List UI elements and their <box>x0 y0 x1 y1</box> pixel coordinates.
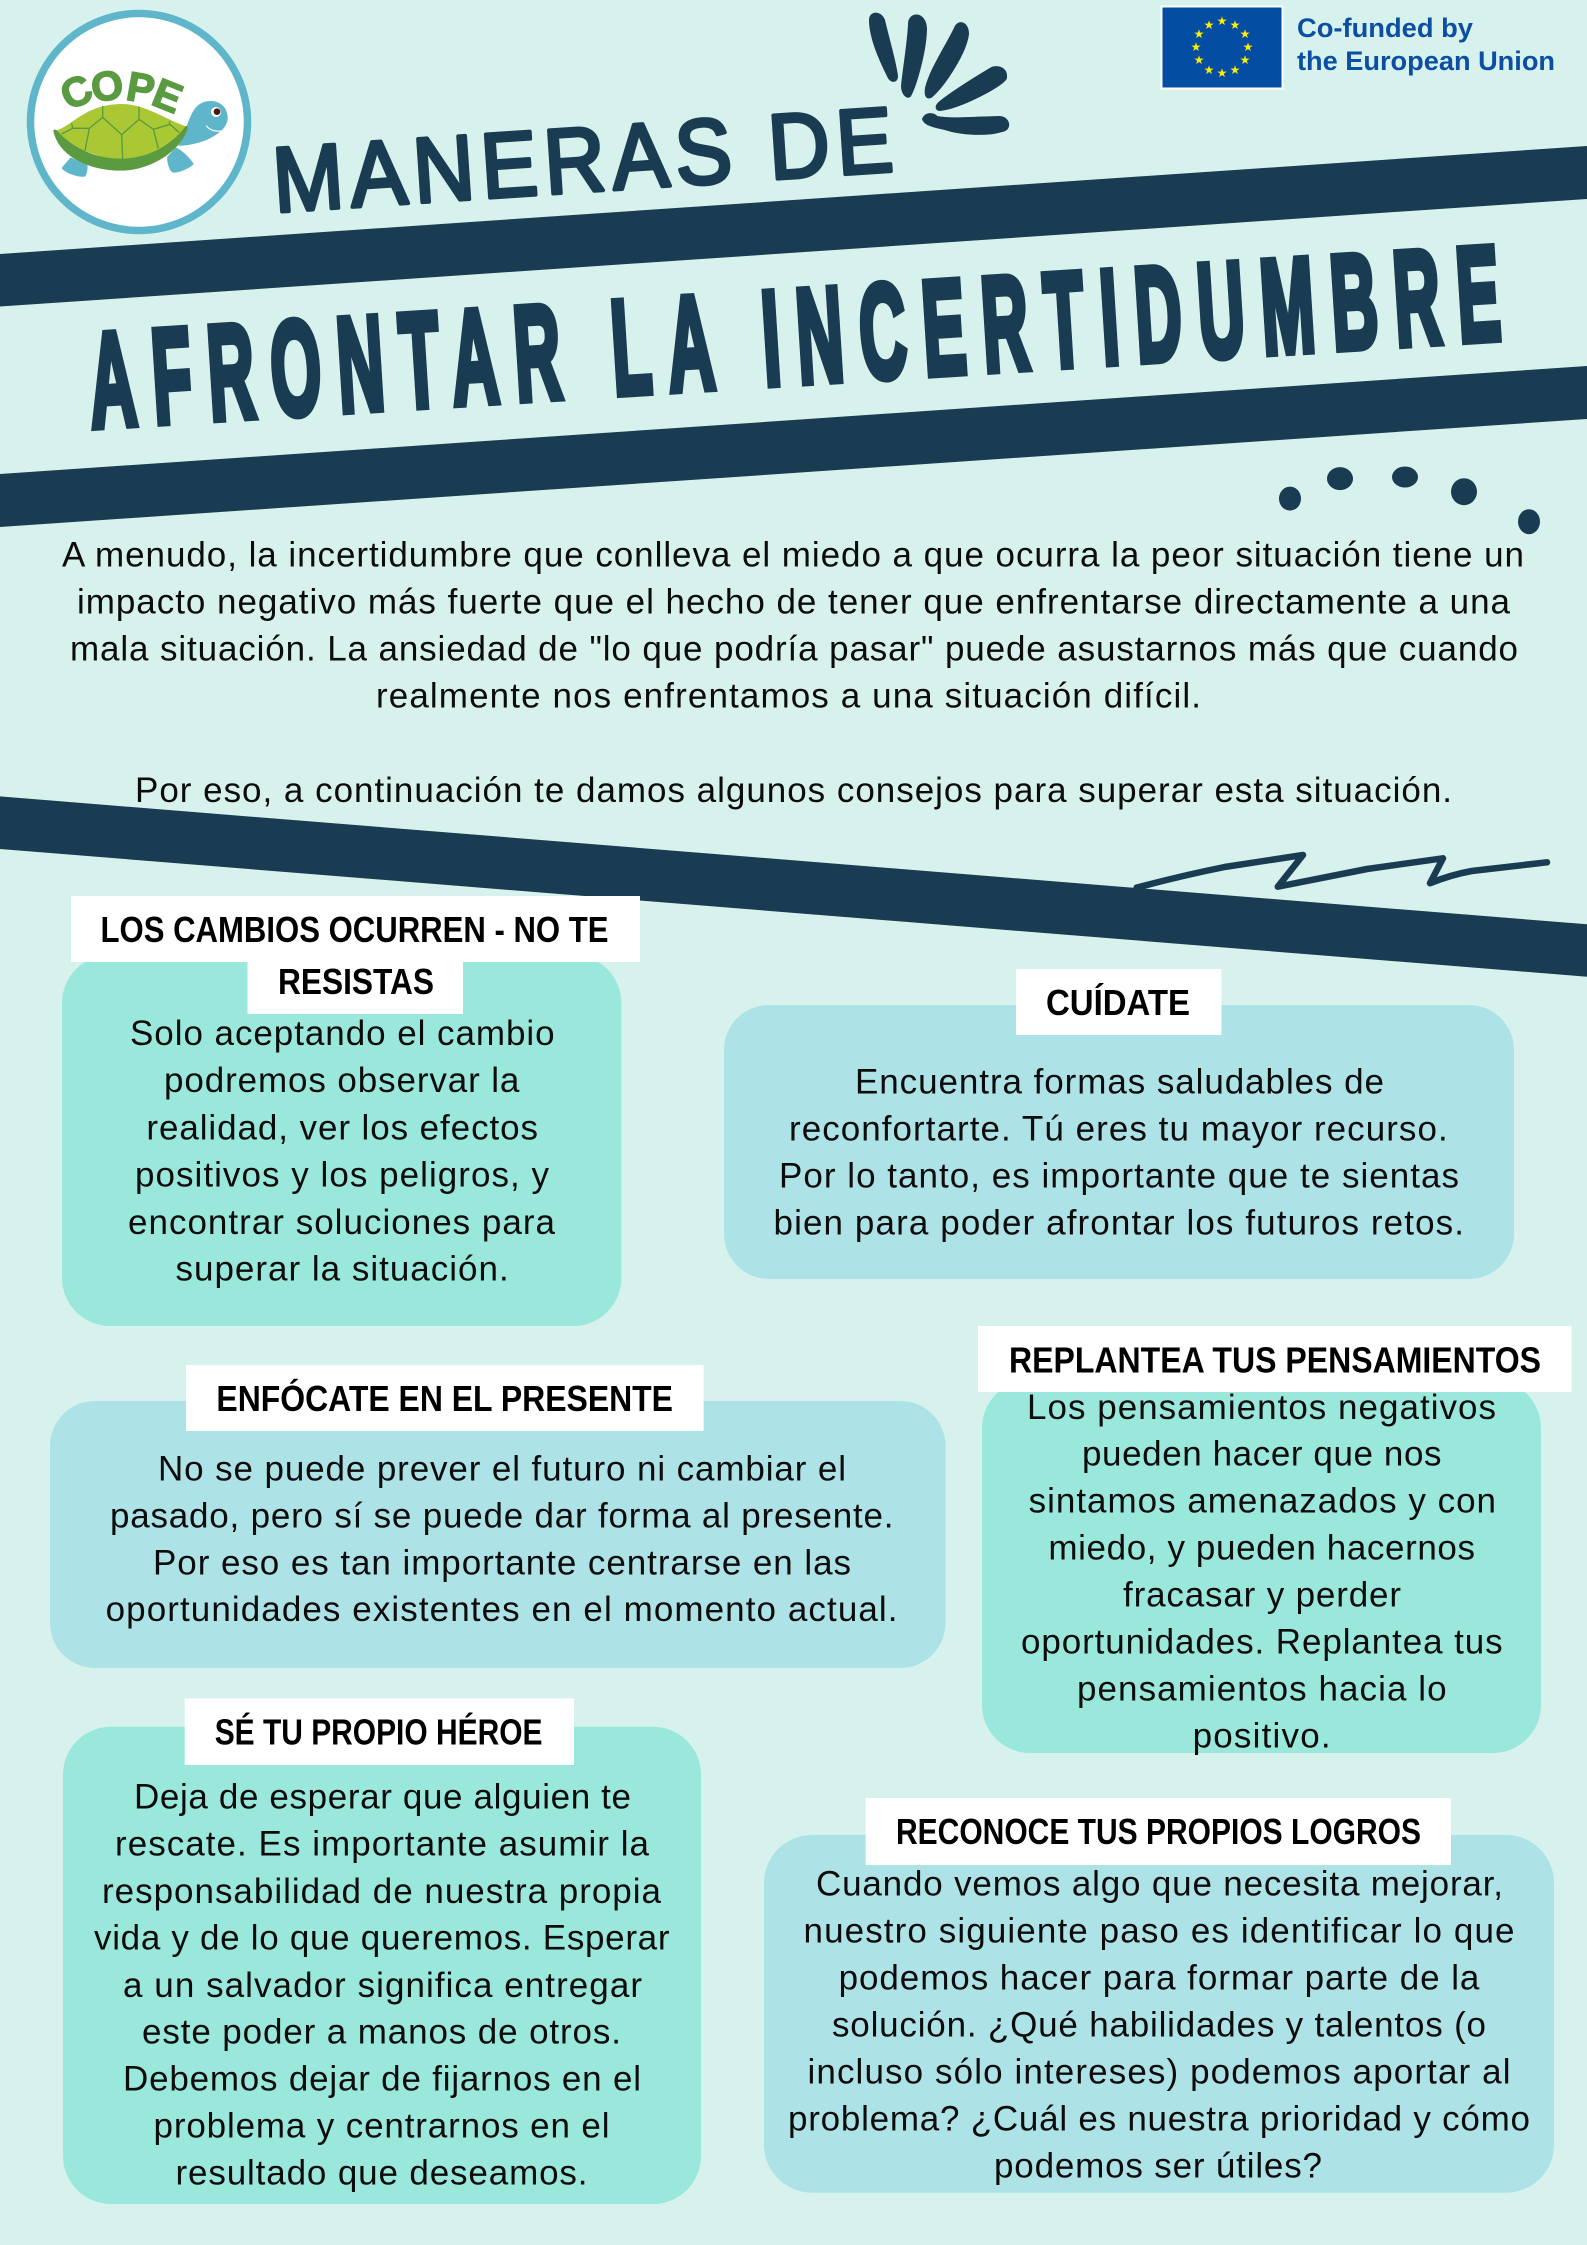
panel: replantea tus pensamientos: Los pensamientos negativos <box>1027 1388 1496 1427</box>
panel: reconoce tus propios logros: RECONOCE TUS PROPIOS LOGROS <box>896 1811 1421 1852</box>
intro paragraph: Por eso, a continuación te damos algunos consejos para superar esta situación. <box>135 771 1452 810</box>
panel: reconoce tus propios logros: incluso sólo intereses) podemos aportar al <box>808 2052 1510 2092</box>
panel: los cambios ocurren: podremos observar la <box>164 1061 520 1100</box>
panel: cuídate: bien para poder afrontar los futuros retos. <box>774 1204 1464 1242</box>
panel: sé tu propio héroe: vida y de lo que queremos. Esperar <box>94 1918 670 1958</box>
lower divider bar <box>0 796 1587 977</box>
panel: enfócate en el presente: Por eso es tan importante centrarse en las <box>153 1544 851 1582</box>
logo: EU flag and co-funded text: ★ <box>1217 66 1227 80</box>
top title bar <box>0 146 1587 306</box>
logo: EU flag and co-funded text: ★ <box>1204 63 1214 77</box>
panel: sé tu propio héroe: Deja de esperar que alguien te <box>134 1778 631 1816</box>
logo: EU flag and co-funded text: Co-funded by <box>1297 13 1473 43</box>
logo: EU flag and co-funded text: ★ <box>1217 14 1227 28</box>
panel: replantea tus pensamientos: sintamos amenazados y con <box>1029 1482 1496 1521</box>
panel: sé tu propio héroe: rescate. Es importante asumir la <box>115 1824 650 1864</box>
second title bar <box>0 366 1587 527</box>
panel: sé tu propio héroe: Debemos dejar de fijarnos en el <box>123 2060 641 2098</box>
squiggle line <box>1137 855 1547 888</box>
panel: los cambios ocurren: encontrar soluciones para <box>128 1203 556 1242</box>
logo: COPE turtle badge: O <box>88 61 126 111</box>
logo: COPE turtle badge: P <box>123 63 158 113</box>
logo: COPE turtle badge: C <box>53 65 100 119</box>
panel: sé tu propio héroe <box>63 1698 701 2204</box>
panel: enfócate en el presente: oportunidades existentes en el momento actual. <box>106 1590 898 1629</box>
logo: EU flag and co-funded text: ★ <box>1194 53 1204 67</box>
decorative dots <box>1279 466 1540 534</box>
intro paragraph: realmente nos enfrentamos a una situación difícil. <box>376 677 1201 716</box>
logo: COPE turtle badge <box>30 14 248 230</box>
panel: sé tu propio héroe: resultado que deseamos. <box>176 2154 588 2192</box>
panel: replantea tus pensamientos: pueden hacer que nos <box>1082 1435 1442 1474</box>
panel: los cambios ocurren <box>62 896 640 1326</box>
intro paragraph: impacto negativo más fuerte que el hecho de tener que enfrentarse directamente a una <box>77 583 1511 622</box>
icon: burst rays <box>870 14 1008 134</box>
panel: reconoce tus propios logros: solución. ¿Qué habilidades y talentos (o <box>832 2006 1486 2044</box>
panel: los cambios ocurren: Solo aceptando el cambio <box>130 1014 555 1053</box>
logo: EU flag and co-funded text: ★ <box>1240 27 1250 41</box>
logo: EU flag and co-funded text: ★ <box>1240 53 1250 67</box>
panel: sé tu propio héroe: a un salvador significa entregar <box>123 1966 642 2005</box>
logo: EU flag and co-funded text: ★ <box>1243 40 1253 54</box>
logo: EU flag and co-funded text <box>1162 6 1555 88</box>
panel: los cambios ocurren: LOS CAMBIOS OCURREN - NO TE <box>100 909 608 950</box>
panel: reconoce tus propios logros: podemos hacer para formar parte de la <box>839 1958 1480 1998</box>
title line 2: AFRONTAR LA INCERTIDUMBRE: AFRONTAR LA INCERTIDUMBRE <box>85 219 1504 456</box>
panel: enfócate en el presente: pasado, pero sí se puede dar forma al presente. <box>110 1496 894 1536</box>
panel: cuídate: reconfortarte. Tú eres tu mayor recurso. <box>789 1110 1448 1149</box>
panel: cuídate <box>724 969 1514 1279</box>
panel: reconoce tus propios logros <box>764 1798 1554 2193</box>
panel: sé tu propio héroe: SÉ TU PROPIO HÉROE <box>215 1712 542 1752</box>
panel: enfócate en el presente <box>50 1365 946 1668</box>
logo: EU flag and co-funded text: ★ <box>1194 27 1204 41</box>
logo: EU flag and co-funded text: the European Union <box>1297 46 1555 76</box>
intro paragraph <box>62 536 1524 810</box>
panel: enfócate en el presente: No se puede prever el futuro ni cambiar el <box>158 1449 846 1488</box>
panel: replantea tus pensamientos: positivo. <box>1193 1716 1331 1755</box>
logo: EU flag and co-funded text: ★ <box>1204 18 1214 32</box>
panel: reconoce tus propios logros: podemos ser útiles? <box>994 2146 1322 2186</box>
panel: reconoce tus propios logros: Cuando vemos algo que necesita mejorar, <box>816 1864 1503 1904</box>
panel: sé tu propio héroe: responsabilidad de nuestra propia <box>102 1872 662 1911</box>
panel: replantea tus pensamientos: fracasar y perder <box>1123 1576 1401 1614</box>
panel: cuídate: Por lo tanto, es importante que te sientas <box>779 1157 1459 1196</box>
panel: sé tu propio héroe: problema y centrarnos en el <box>154 2106 610 2146</box>
logo: EU flag and co-funded text: ★ <box>1191 40 1201 54</box>
intro paragraph: mala situación. La ansiedad de "lo que podría pasar" puede asustarnos más que cuando <box>70 630 1518 669</box>
panel: reconoce tus propios logros: nuestro siguiente paso es identificar lo que <box>804 1912 1514 1950</box>
panel: enfócate en el presente: ENFÓCATE EN EL PRESENTE <box>216 1377 673 1419</box>
panel: sé tu propio héroe: este poder a manos de otros. <box>142 2012 621 2052</box>
panel: los cambios ocurren: positivos y los peligros, y <box>135 1156 550 1195</box>
title line 1: MANERAS DE: MANERAS DE <box>269 88 896 232</box>
panel: replantea tus pensamientos: miedo, y pueden hacernos <box>1048 1529 1475 1568</box>
panel: los cambios ocurren: superar la situación. <box>176 1250 509 1289</box>
logo: COPE turtle badge: E <box>146 69 189 122</box>
intro paragraph: A menudo, la incertidumbre que conlleva el miedo a que ocurra la peor situación tiene un <box>62 536 1524 575</box>
panel: reconoce tus propios logros: problema? ¿Cuál es nuestra prioridad y cómo <box>788 2100 1530 2138</box>
panel: los cambios ocurren: RESISTAS <box>278 961 434 1002</box>
panel: replantea tus pensamientos: pensamientos hacia lo <box>1077 1669 1447 1708</box>
panel: replantea tus pensamientos <box>978 1326 1572 1755</box>
panel: cuídate: Encuentra formas saludables de <box>855 1063 1384 1102</box>
panel: cuídate: CUÍDATE <box>1046 982 1190 1023</box>
panel: replantea tus pensamientos: oportunidades. Replantea tus <box>1021 1622 1503 1662</box>
logo: EU flag and co-funded text: ★ <box>1230 18 1240 32</box>
panel: los cambios ocurren: realidad, ver los efectos <box>146 1109 538 1148</box>
logo: EU flag and co-funded text: ★ <box>1230 63 1240 77</box>
